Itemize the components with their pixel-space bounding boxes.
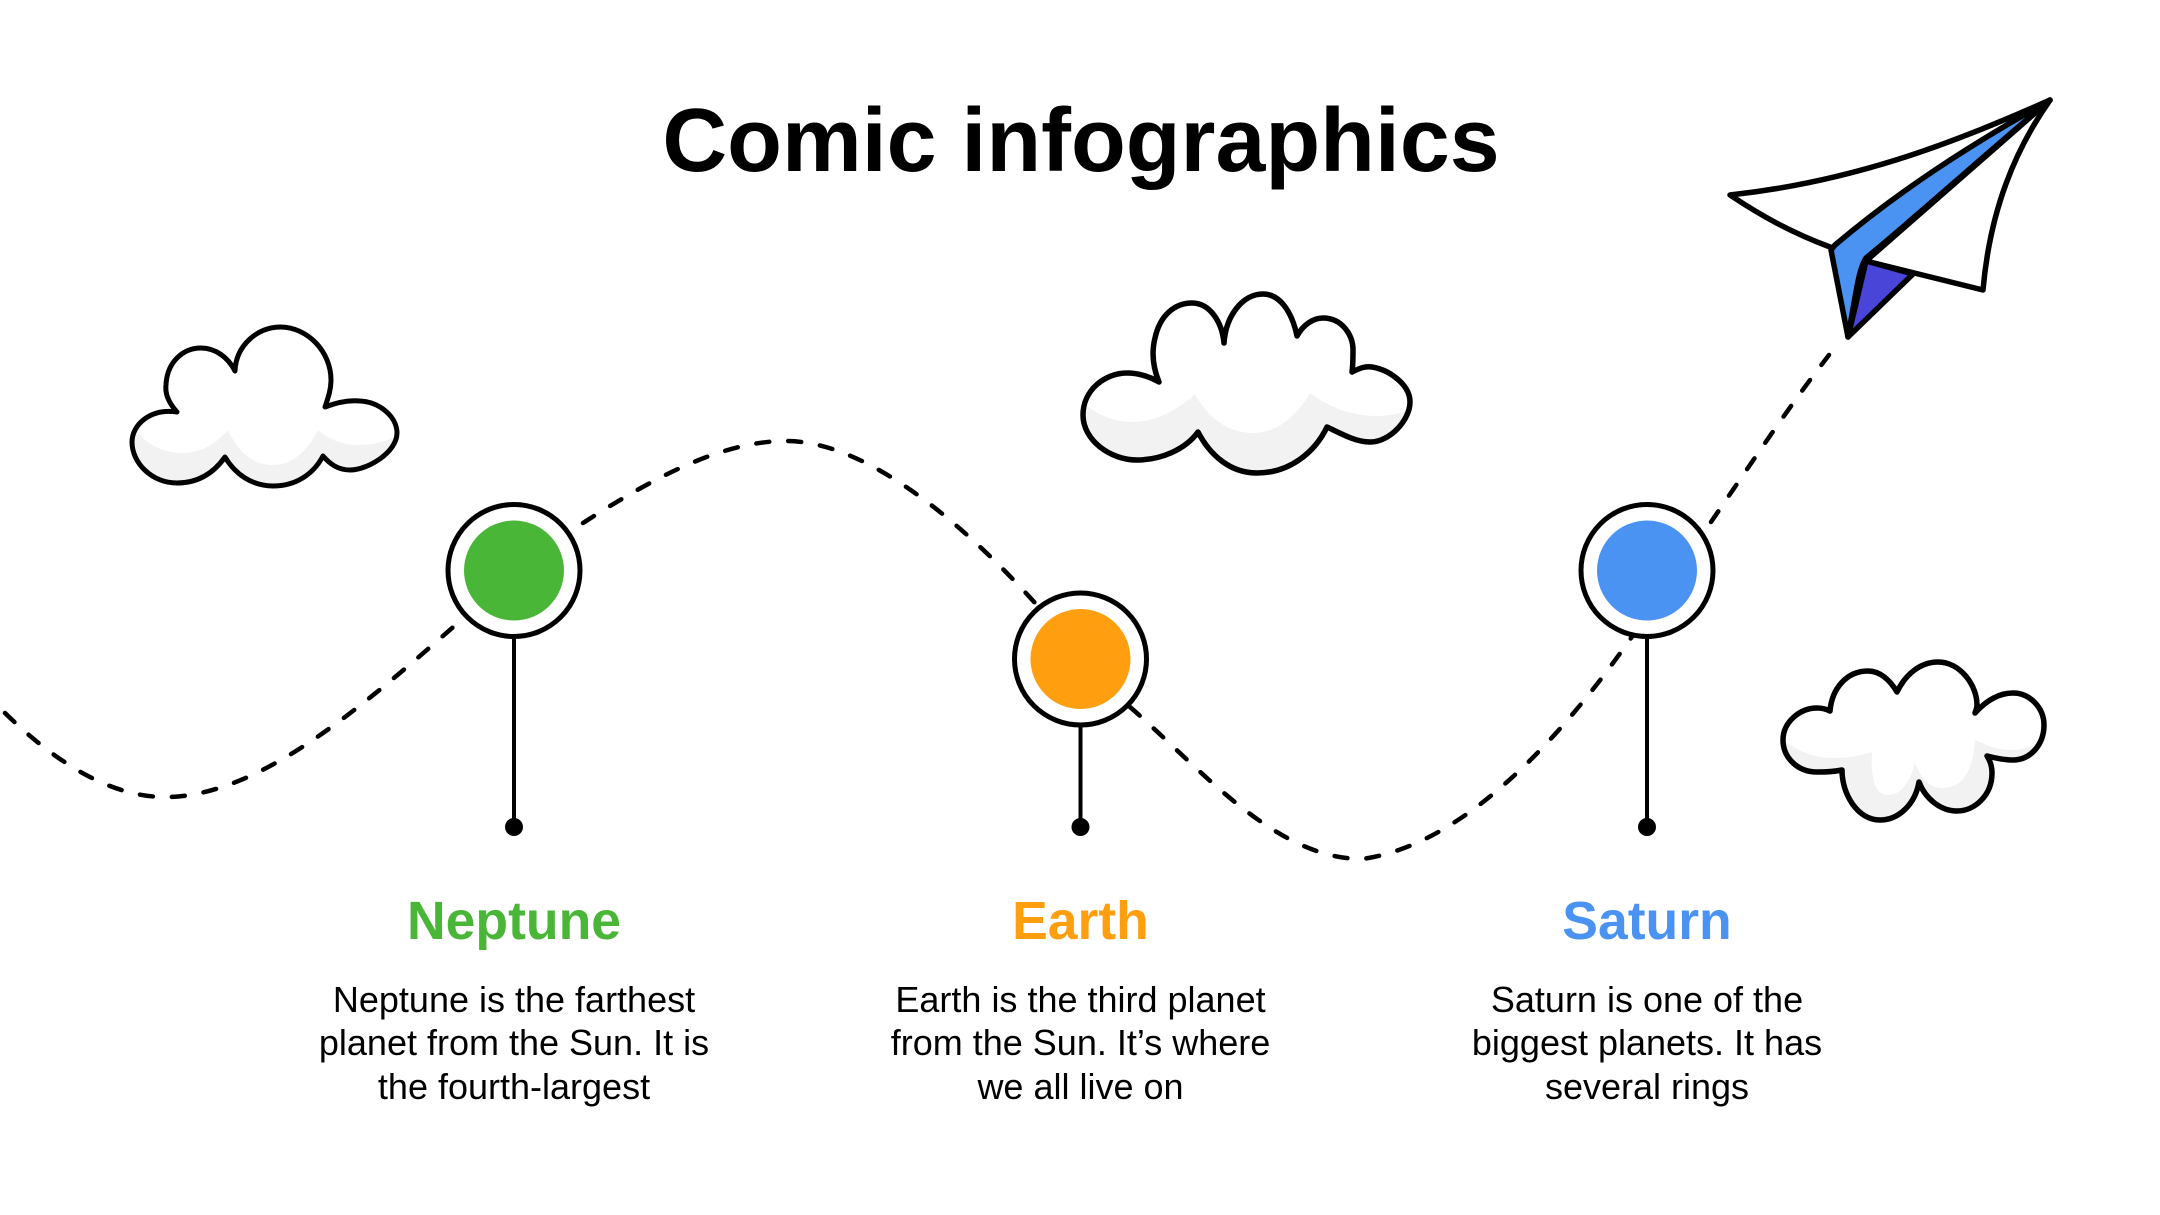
text: Neptune: the fourth-largest <box>378 1066 650 1107</box>
marker: Saturn <box>1581 504 1713 836</box>
text: Earth: Earth is the third planet <box>895 979 1266 1020</box>
text: Earth: from the Sun. It’s where <box>891 1022 1270 1063</box>
text: Neptune: Neptune is the farthest <box>333 979 695 1020</box>
dashed flight path <box>5 355 1829 859</box>
cloud: lower right <box>1780 662 2045 825</box>
title: Comic infographics <box>662 90 1500 190</box>
text: Neptune: planet from the Sun. It is <box>319 1022 709 1063</box>
text: Saturn: biggest planets. It has <box>1472 1022 1822 1063</box>
cloud: top left <box>130 327 400 490</box>
heading: Earth: Earth <box>1012 892 1149 950</box>
cloud: top centre <box>1080 294 1415 480</box>
text: Earth: we all live on <box>977 1066 1184 1107</box>
text: Earth <box>891 979 1270 1107</box>
marker: Neptune <box>448 504 580 836</box>
heading: Saturn: Saturn <box>1562 892 1732 950</box>
heading: Neptune: Neptune <box>407 892 621 950</box>
marker: Earth <box>1014 593 1146 836</box>
text: Saturn <box>1472 979 1822 1107</box>
text: Neptune <box>319 979 709 1107</box>
text: Saturn: Saturn is one of the <box>1491 979 1803 1020</box>
icon: paper plane <box>1730 100 2050 337</box>
text: Saturn: several rings <box>1545 1066 1749 1107</box>
